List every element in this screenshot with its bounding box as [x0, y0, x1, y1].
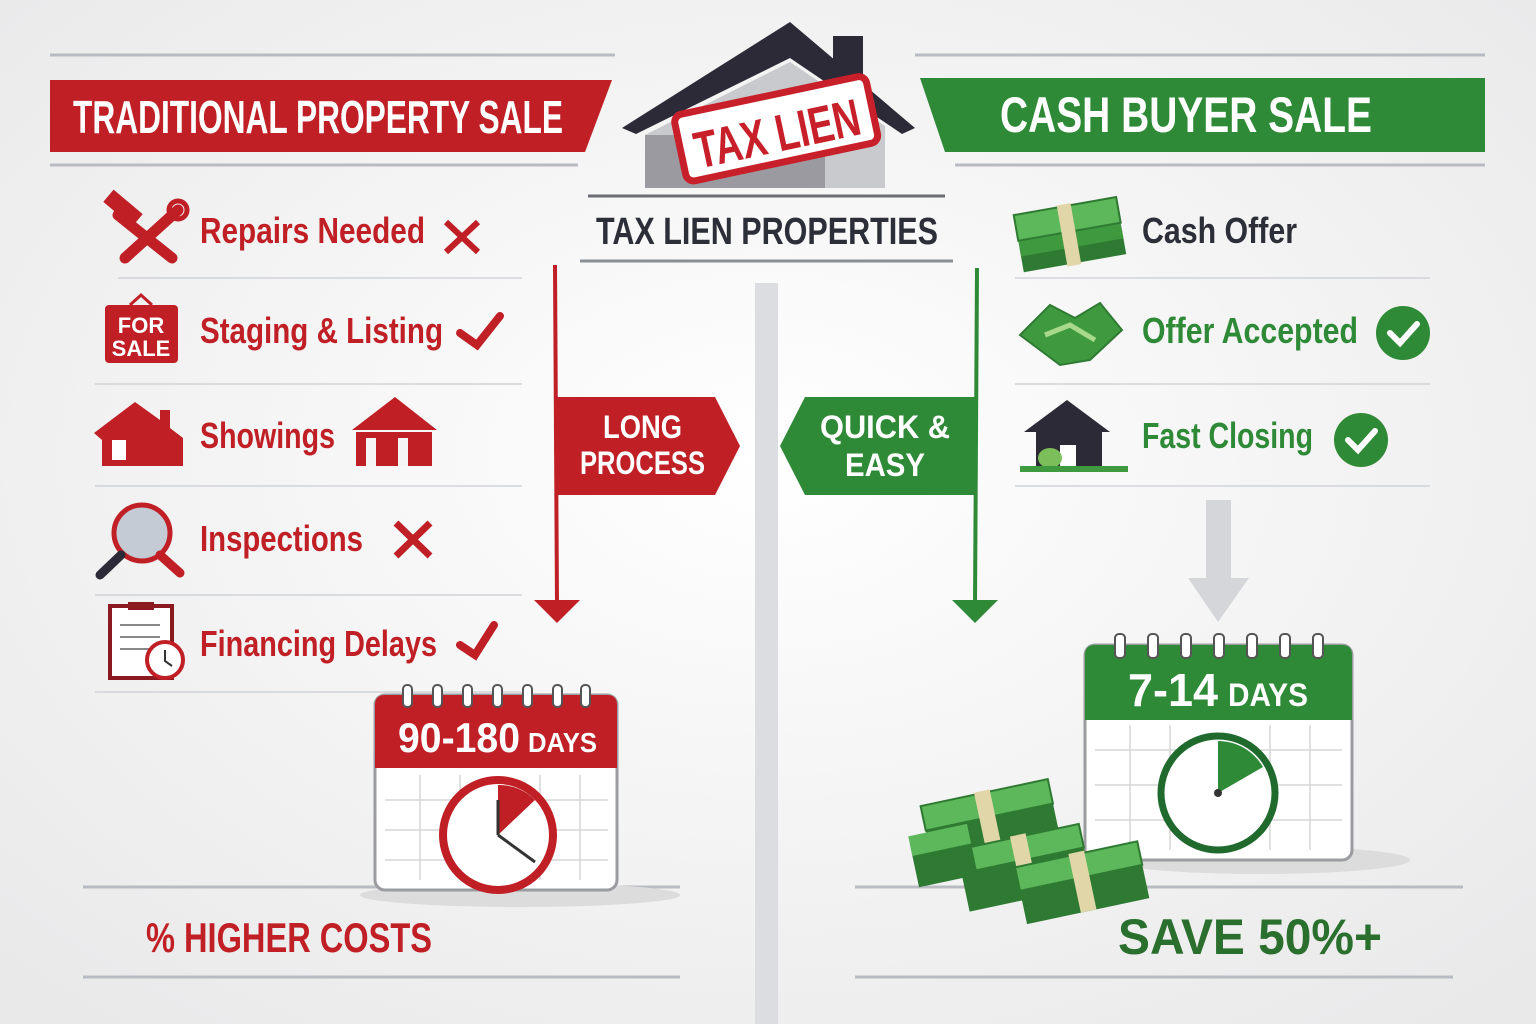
row: staging and listing [105, 295, 500, 363]
row: fast closing: Fast Closing [1142, 415, 1313, 456]
row: staging and listing: SALE [112, 336, 170, 361]
row: staging and listing: FOR [118, 313, 164, 338]
arrow: gray down [1188, 500, 1249, 622]
arrow: quick and easy [780, 268, 998, 623]
banner: cash buyer sale [920, 78, 1485, 152]
banner: traditional property sale: TRADITIONAL PROPERTY SALE [73, 91, 563, 143]
icon: money stacks [908, 777, 1149, 924]
calendar: 90-180 days: 90-180 [398, 714, 520, 761]
banner: cash buyer sale: CASH BUYER SALE [1000, 87, 1372, 143]
row: staging and listing: Staging & Listing [200, 310, 443, 351]
calendar: 7-14 days: DAYS [1228, 677, 1308, 713]
row: cash offer: Cash Offer [1142, 210, 1297, 251]
row: inspections: Inspections [200, 518, 363, 559]
calendar: 7-14 days [1085, 634, 1410, 874]
row: showings: Showings [200, 415, 335, 456]
row: offer accepted [1020, 303, 1430, 365]
arrow: long process [534, 265, 740, 623]
text: save 50%+: SAVE 50%+ [1118, 909, 1382, 965]
icon: tax lien house: TAX LIEN [689, 89, 866, 180]
row: offer accepted: Offer Accepted [1142, 310, 1358, 351]
row: financing delays: Financing Delays [200, 623, 437, 664]
row: inspections [100, 505, 430, 575]
calendar: 90-180 days [360, 685, 680, 907]
calendar: 90-180 days: DAYS [528, 727, 597, 758]
arrow: long process: LONG [603, 409, 682, 445]
row: fast closing [1020, 400, 1388, 472]
arrow: quick and easy: QUICK & [820, 409, 950, 445]
center divider [755, 283, 778, 1024]
row: cash offer [1013, 195, 1297, 274]
row: repairs needed [103, 190, 478, 258]
row: financing delays [110, 602, 494, 678]
row: showings [94, 397, 437, 466]
icon: tax lien house [588, 22, 945, 196]
row: repairs needed: Repairs Needed [200, 210, 425, 251]
text: higher costs: % HIGHER COSTS [146, 914, 432, 961]
banner: traditional property sale [50, 80, 612, 152]
calendar: 7-14 days: 7-14 [1128, 664, 1218, 716]
arrow: long process: PROCESS [580, 445, 705, 481]
arrow: quick and easy: EASY [845, 447, 925, 483]
heading: tax lien properties: TAX LIEN PROPERTIES [596, 211, 938, 253]
